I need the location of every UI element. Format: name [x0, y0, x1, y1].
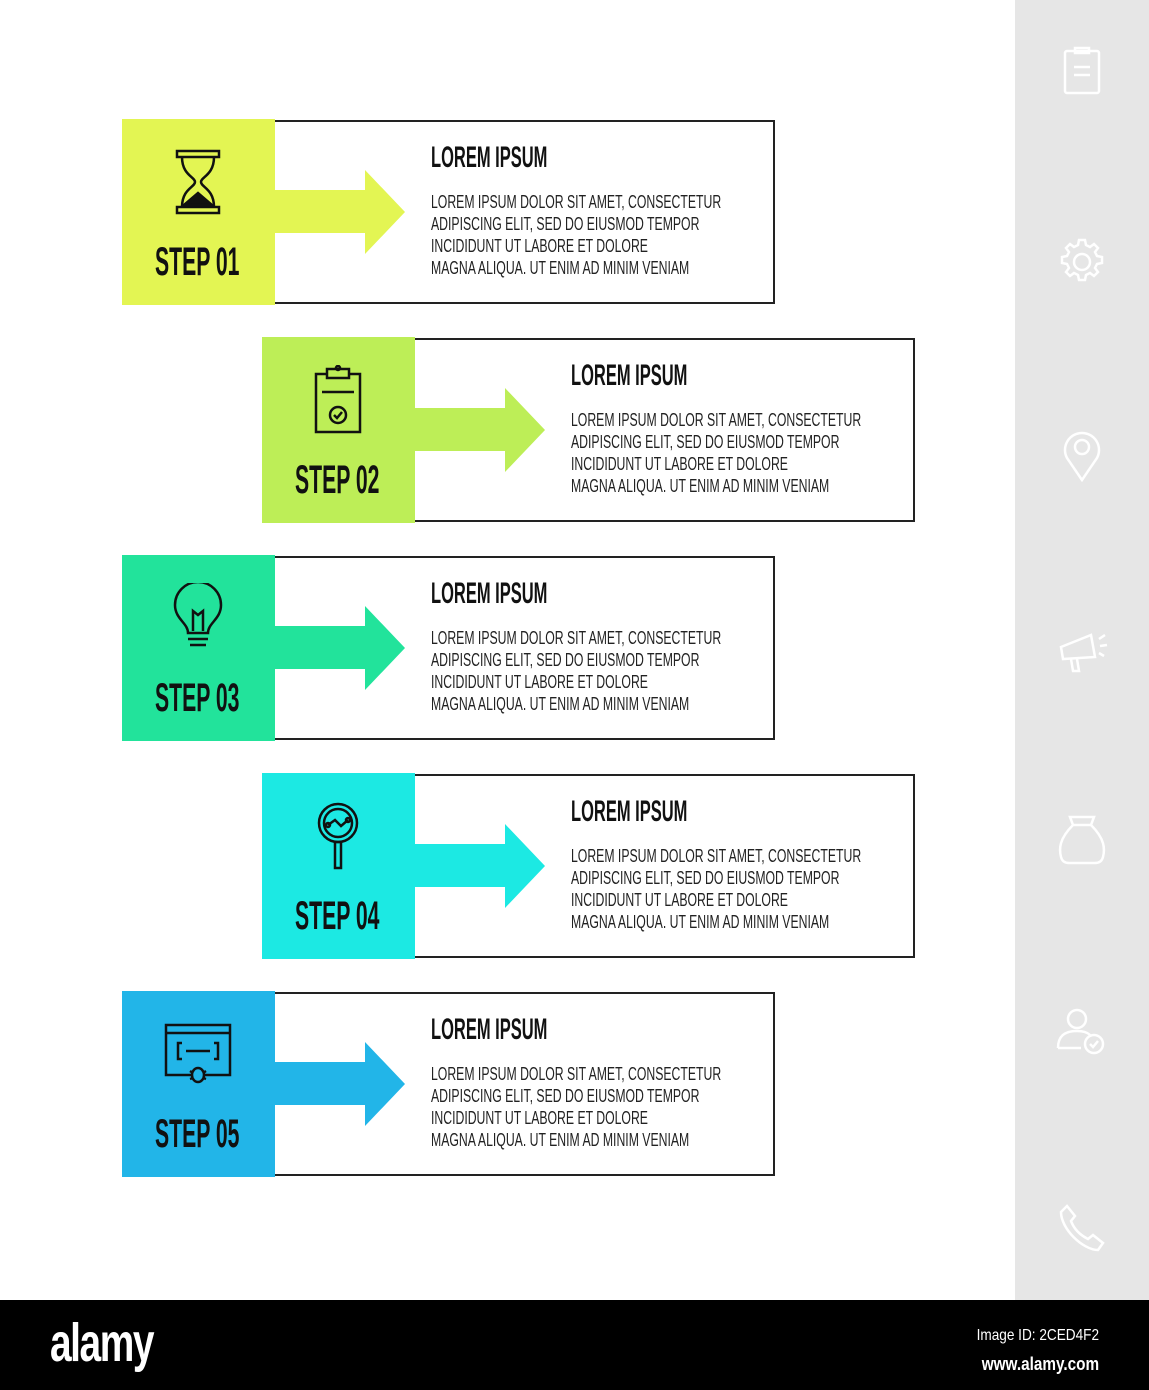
body 2: LOREM IPSUM DOLOR SIT AMET, CONSECTETUR: [571, 410, 861, 430]
content box step 3: [275, 556, 775, 740]
arrow step 1: [275, 170, 405, 254]
arrow step 5: [275, 1042, 405, 1126]
body 5: ADIPISCING ELIT, SED DO EIUSMOD TEMPOR: [431, 1086, 699, 1106]
step label 1: STEP 01: [155, 240, 239, 284]
body 5: INCIDIDUNT UT LABORE ET DOLORE: [431, 1108, 648, 1128]
icon: sidebar bag: [1059, 816, 1105, 864]
title 1: LOREM IPSUM: [431, 141, 547, 174]
color box step 5: [122, 991, 275, 1177]
body 3: LOREM IPSUM DOLOR SIT AMET, CONSECTETUR: [431, 628, 721, 648]
body 1: MAGNA ALIQUA. UT ENIM AD MINIM VENIAM: [431, 258, 689, 278]
color box step 2: [262, 337, 415, 523]
body 1: INCIDIDUNT UT LABORE ET DOLORE: [431, 236, 648, 256]
footer bar: [0, 1300, 1149, 1390]
icon: sidebar clipboard: [1064, 46, 1100, 94]
image id text: www.alamy.com: [982, 1354, 1099, 1374]
step 5: [122, 991, 775, 1177]
body 4: [571, 846, 861, 932]
arrow step 3: [275, 606, 405, 690]
body 2: ADIPISCING ELIT, SED DO EIUSMOD TEMPOR: [571, 432, 839, 452]
title 5: LOREM IPSUM: [431, 1013, 547, 1046]
body 1: LOREM IPSUM DOLOR SIT AMET, CONSECTETUR: [431, 192, 721, 212]
body 4: INCIDIDUNT UT LABORE ET DOLORE: [571, 890, 788, 910]
step label 5: STEP 05: [155, 1112, 239, 1156]
body 4: LOREM IPSUM DOLOR SIT AMET, CONSECTETUR: [571, 846, 861, 866]
step label 2: STEP 02: [295, 458, 379, 502]
body 5: LOREM IPSUM DOLOR SIT AMET, CONSECTETUR: [431, 1064, 721, 1084]
icon: sidebar user check: [1056, 1008, 1104, 1054]
content box step 5: [275, 992, 775, 1176]
body 2: INCIDIDUNT UT LABORE ET DOLORE: [571, 454, 788, 474]
body 2: [571, 410, 861, 496]
icon: sidebar phone: [1060, 1204, 1104, 1252]
body 4: ADIPISCING ELIT, SED DO EIUSMOD TEMPOR: [571, 868, 839, 888]
body 2: MAGNA ALIQUA. UT ENIM AD MINIM VENIAM: [571, 476, 829, 496]
icon: magnifier chart: [318, 802, 358, 870]
icon: hourglass: [176, 150, 220, 214]
step 2: [262, 337, 915, 523]
content box step 1: [275, 120, 775, 304]
title 4: LOREM IPSUM: [571, 795, 687, 828]
content box step 2: [415, 338, 915, 522]
icon: browser bug: [164, 1024, 232, 1084]
color box step 3: [122, 555, 275, 741]
body 3: MAGNA ALIQUA. UT ENIM AD MINIM VENIAM: [431, 694, 689, 714]
icon: light bulb: [174, 583, 222, 646]
title 2: LOREM IPSUM: [571, 359, 687, 392]
sidebar: [1015, 0, 1149, 1300]
arrow step 4: [415, 824, 545, 908]
icon: clipboard: [314, 365, 362, 434]
content box step 4: [415, 774, 915, 958]
icon: sidebar gear: [1060, 238, 1104, 282]
image id text: Image ID: 2CED4F2: [977, 1327, 1099, 1344]
color box step 1: [122, 119, 275, 305]
step 3: [122, 555, 775, 741]
icon: sidebar location: [1064, 432, 1100, 482]
body 4: MAGNA ALIQUA. UT ENIM AD MINIM VENIAM: [571, 912, 829, 932]
step label 3: STEP 03: [155, 676, 239, 720]
image id text: [977, 1327, 1099, 1374]
body 3: ADIPISCING ELIT, SED DO EIUSMOD TEMPOR: [431, 650, 699, 670]
body 5: [431, 1064, 721, 1150]
body 3: INCIDIDUNT UT LABORE ET DOLORE: [431, 672, 648, 692]
step label 4: STEP 04: [295, 894, 379, 938]
step 1: [122, 119, 775, 305]
body 5: MAGNA ALIQUA. UT ENIM AD MINIM VENIAM: [431, 1130, 689, 1150]
title 3: LOREM IPSUM: [431, 577, 547, 610]
body 1: ADIPISCING ELIT, SED DO EIUSMOD TEMPOR: [431, 214, 699, 234]
color box step 4: [262, 773, 415, 959]
logo: alamy: alamy: [50, 1313, 153, 1373]
body 3: [431, 628, 721, 714]
body 1: [431, 192, 721, 278]
arrow step 2: [415, 388, 545, 472]
icon: sidebar megaphone: [1060, 634, 1107, 672]
step 4: [262, 773, 915, 959]
